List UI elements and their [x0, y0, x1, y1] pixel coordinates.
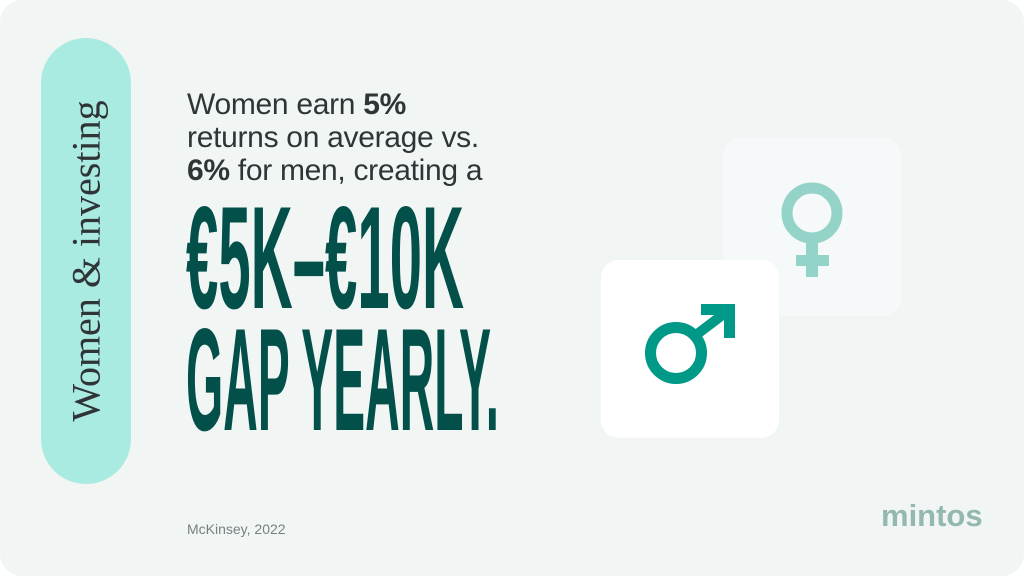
- icon card: female: [723, 138, 901, 316]
- icon card: male: [601, 260, 779, 438]
- pill text: Women & investing: Women & investing: [64, 100, 108, 422]
- side pill label: [41, 38, 131, 484]
- source: McKinsey, 2022: [187, 521, 286, 537]
- big headline: €5K–€10K: [186, 176, 464, 339]
- logo: mintos: [881, 498, 983, 533]
- intro text: 6% for men, creating a: [187, 154, 482, 187]
- intro text: [187, 88, 483, 187]
- intro text: Women earn 5%: [187, 88, 406, 121]
- intro text: returns on average vs.: [187, 121, 479, 154]
